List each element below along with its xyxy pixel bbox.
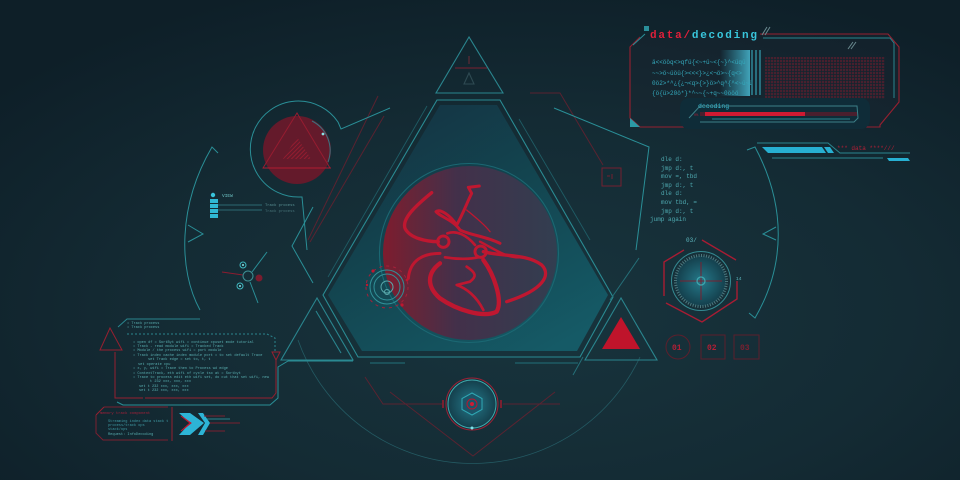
base connector bars — [370, 362, 578, 364]
panel: data decoding terminal: {ö{ü>20ö*}*^~~{~+q~~0ööö — [652, 90, 739, 97]
angle line — [292, 207, 313, 283]
panel: terminal log lower left: • ContextTrack, eth wifi of cycle tso at = Sortbyt — [133, 371, 241, 376]
organism strands — [405, 186, 546, 314]
panel: radar circle upper left — [250, 101, 390, 250]
panel: terminal log lower left: set operate cpu — [138, 362, 170, 367]
indicator buttons 01 02 03 — [666, 335, 759, 359]
faint red construction lines — [308, 93, 603, 456]
hexagon gauge: 14 — [736, 276, 742, 282]
battery status indicator: Track process — [265, 209, 295, 214]
panel: terminal log lower left: • Track - read module wifi = Tracked Track — [133, 344, 224, 349]
progress decoding bar: 0% — [694, 114, 699, 118]
code listing: mov =, tbd — [661, 173, 697, 180]
panel: terminal log lower left: • Track process — [127, 325, 159, 330]
blue status bars with red readout: *** data ****/// — [837, 145, 895, 152]
bottom right triangle with red warning — [573, 258, 657, 375]
upper right connector outline — [554, 108, 649, 250]
indicator buttons 01 02 03: 03 — [740, 344, 750, 353]
panel: lower left command box: Streaming index data stack t — [108, 419, 168, 424]
panel: lower left command box: memory track component — [100, 411, 150, 416]
code listing: mov tbd, = — [661, 199, 697, 206]
panel: terminal log lower left — [100, 319, 353, 405]
code listing: dle d: — [661, 190, 683, 197]
battery status indicator — [210, 193, 295, 218]
panel: data decoding terminal: ä<<ööq<>qfü{<~+ü~<{~}^<üqü — [652, 59, 746, 66]
code listing: jmp d:, t — [661, 182, 693, 189]
code listing: jmp d:, t — [661, 208, 693, 215]
panel: terminal log lower left: set t 232 xxx, xxx, xxx — [139, 389, 189, 393]
panel: terminal log lower left: set t 232 xxx, xxx, xxx — [139, 385, 189, 389]
top small triangle — [436, 37, 503, 93]
indicator buttons 01 02 03: 01 — [672, 344, 682, 353]
code listing: jump again — [650, 216, 686, 223]
small ring gauge on disc edge — [366, 266, 408, 308]
panel: data decoding terminal: 0ö2>*^¿{¿¬<q>{>}ö>^q^{^<~ü~ü — [652, 80, 753, 87]
panel: terminal log lower left: • x, y, wifi = Trace then to Process wd edge — [133, 366, 228, 371]
hexagon gauge: 03/ — [686, 237, 697, 244]
panel: lower left command box — [96, 407, 172, 441]
battery status indicator: VIEW — [222, 193, 233, 199]
panel: terminal log lower left: t 232 xxx, xxx, xxx — [150, 380, 191, 384]
panel: terminal log lower left: • Track process — [127, 321, 159, 326]
progress decoding bar: decoding — [698, 103, 729, 110]
crosshair nodes — [222, 252, 267, 303]
panel: terminal log lower left: • Trace to process edit eth wifi set, do cut that set wifi, new — [133, 375, 270, 380]
panel: terminal log lower left: • Track index cache index module port = to set default Trace — [133, 353, 262, 358]
central disc with red organism — [380, 164, 558, 342]
bottom left triangle — [281, 298, 353, 360]
hexagon gauge — [664, 237, 742, 322]
panel: lower left command box: Request: InfoDecoding — [108, 432, 153, 437]
bottom hexagon dial — [443, 378, 501, 430]
panel: terminal log lower left: set Track edge = set to, t, t — [148, 357, 211, 362]
indicator buttons 01 02 03: 02 — [707, 344, 717, 353]
left arc with pointer — [185, 147, 218, 310]
code listing: dle d: — [661, 156, 683, 163]
code listing: jmp d:, t — [661, 165, 693, 172]
central truncated triangle — [323, 100, 613, 357]
panel: terminal log lower left: • Module / the process wifi = port module — [133, 348, 221, 353]
panel: lower left command box: process/track ops — [108, 423, 145, 428]
large orbit arc — [298, 340, 640, 464]
panel: data decoding terminal — [630, 26, 899, 127]
icon: double chevron arrows — [179, 413, 240, 435]
panel: lower left command box: stack/ops — [108, 427, 127, 432]
battery status indicator: Track process — [265, 203, 295, 208]
right arc with pointer — [747, 147, 778, 318]
progress decoding bar — [680, 98, 870, 129]
heading: data/decoding — [650, 30, 757, 42]
icon: dashed target square — [602, 168, 621, 186]
blue status bars with red readout — [757, 143, 910, 161]
panel: data decoding terminal: ~~>ö~üöü{><<<}>¿<¬ö>~{q<> — [652, 70, 742, 77]
panel: terminal log lower left: • open df = SortByt wifi = continue cpuset mode tutorial — [133, 340, 254, 345]
